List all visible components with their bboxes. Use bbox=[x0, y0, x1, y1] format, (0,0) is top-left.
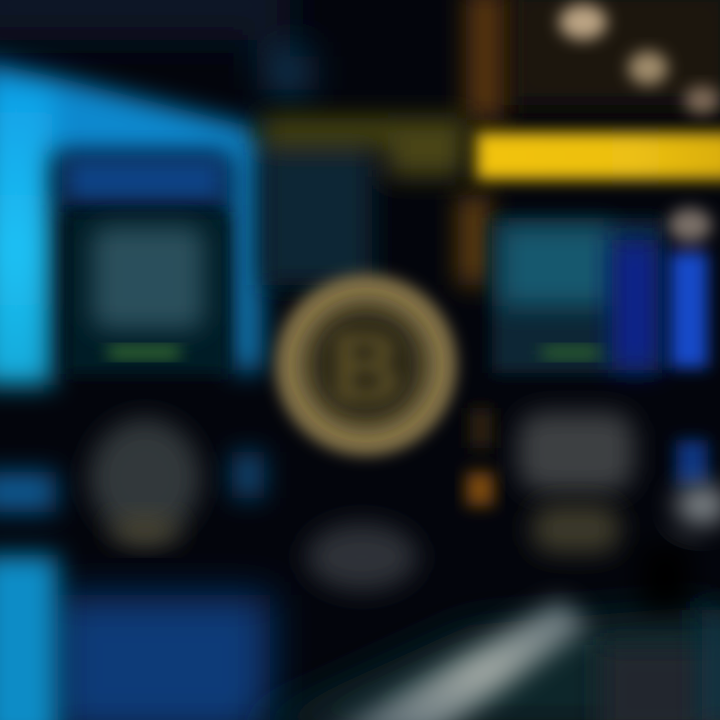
decorative lamps bbox=[559, 4, 607, 40]
bright blue side panel bbox=[668, 208, 712, 485]
orange pillar accents bbox=[466, 408, 494, 506]
person silhouette bbox=[640, 485, 720, 720]
card text block bbox=[92, 226, 204, 330]
right screen green footer bbox=[542, 347, 600, 358]
blue header band bbox=[62, 155, 227, 205]
left mid blue strips bbox=[0, 452, 264, 512]
left bright cyan panel bbox=[0, 60, 262, 385]
olive header band bbox=[262, 118, 467, 285]
lower stat tint bbox=[109, 516, 181, 544]
floor bbox=[240, 600, 720, 720]
bitcoin coin bbox=[276, 275, 456, 455]
floor light streak bbox=[320, 600, 590, 720]
bottom left cyan strip bbox=[0, 555, 58, 720]
top right ceiling with lights bbox=[510, 0, 720, 114]
right screen text block bbox=[500, 226, 612, 306]
yellow header band bbox=[476, 132, 720, 180]
top left dark ceiling bbox=[0, 0, 306, 91]
right lower tint bbox=[532, 505, 620, 553]
orange vertical pillar bbox=[458, 0, 504, 285]
right screen card bbox=[492, 218, 662, 373]
right screen blue edge bbox=[612, 240, 658, 370]
card green footer bbox=[108, 347, 180, 358]
left lower stats circle bbox=[89, 418, 201, 544]
left dark card bbox=[66, 212, 228, 374]
right lower stats block bbox=[518, 412, 634, 553]
bottom left blue panel bbox=[0, 555, 270, 720]
centre lower stats block bbox=[306, 523, 418, 591]
bitcoin symbol: B bbox=[331, 314, 401, 421]
